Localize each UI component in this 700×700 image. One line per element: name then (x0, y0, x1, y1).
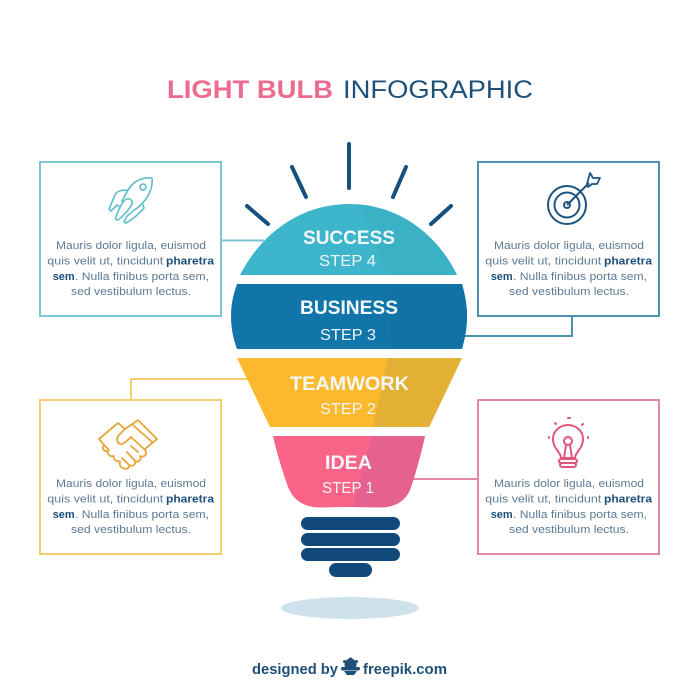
panel: teamwork: sed vestibulum lectus. (71, 524, 191, 536)
bulb segment: business (231, 284, 470, 349)
connector: business (465, 316, 572, 336)
panel: idea: pharetra (604, 494, 653, 506)
panel: success: . Nulla finibus porta sem, (75, 271, 209, 283)
panel: idea (478, 400, 659, 554)
bulb segment: teamwork (237, 358, 465, 427)
panel: business: pharetra (604, 256, 653, 268)
panel: teamwork: quis velit ut, tincidunt (47, 494, 163, 506)
panel: teamwork: . Nulla finibus porta sem, (75, 509, 209, 521)
bulb segment: business: STEP 3 (320, 327, 376, 344)
panel: business: sem (491, 271, 513, 283)
icon: rocket (109, 178, 152, 223)
panel: success: Mauris dolor ligula, euismod (56, 240, 206, 252)
bulb screw base (301, 517, 400, 577)
bulb segment: success (240, 200, 460, 275)
panel: success: sed vestibulum lectus. (71, 286, 191, 298)
bulb segment: idea: STEP 1 (322, 480, 374, 497)
title: INFOGRAPHIC (343, 76, 533, 104)
panel: business (478, 162, 659, 316)
footer credit: designed by (252, 661, 339, 678)
icon: handshake (99, 420, 157, 469)
bulb shadow (281, 597, 419, 619)
icon: freepik logo (341, 658, 360, 675)
connector: success (221, 240, 264, 242)
panel: business: . Nulla finibus porta sem, (513, 271, 647, 283)
icon: light bulb (549, 418, 588, 467)
panel: idea: . Nulla finibus porta sem, (513, 509, 647, 521)
bulb segment: success: SUCCESS (303, 228, 395, 249)
panel: success: sem (53, 271, 75, 283)
panel: success: quis velit ut, tincidunt (47, 256, 163, 268)
footer credit (252, 658, 447, 678)
panel: teamwork: sem (53, 509, 75, 521)
panel: idea: sed vestibulum lectus. (509, 524, 629, 536)
panel: idea: sem (491, 509, 513, 521)
icon: light rays (247, 144, 451, 224)
panel: business: sed vestibulum lectus. (509, 286, 629, 298)
footer credit: freepik.com (363, 661, 447, 678)
panel: idea: quis velit ut, tincidunt (485, 494, 601, 506)
bulb segment: success: STEP 4 (319, 253, 376, 270)
icon: target (548, 173, 600, 224)
panel: business: Mauris dolor ligula, euismod (494, 240, 644, 252)
panel: business: quis velit ut, tincidunt (485, 256, 601, 268)
panel: idea: Mauris dolor ligula, euismod (494, 478, 644, 490)
connector: idea (411, 478, 478, 480)
connector: teamwork (131, 379, 248, 400)
title (167, 76, 533, 104)
bulb segment: teamwork: TEAMWORK (290, 374, 409, 395)
panel: success: pharetra (166, 256, 215, 268)
bulb segment: business: BUSINESS (300, 298, 398, 319)
bulb segment: idea (273, 436, 430, 510)
panel: teamwork (40, 400, 221, 554)
bulb segment: teamwork: STEP 2 (320, 401, 376, 418)
bulb segment: idea: IDEA (325, 453, 372, 474)
panel: success (40, 162, 221, 316)
title: LIGHT BULB (167, 76, 333, 104)
panel: teamwork: pharetra (166, 494, 215, 506)
panel: teamwork: Mauris dolor ligula, euismod (56, 478, 206, 490)
